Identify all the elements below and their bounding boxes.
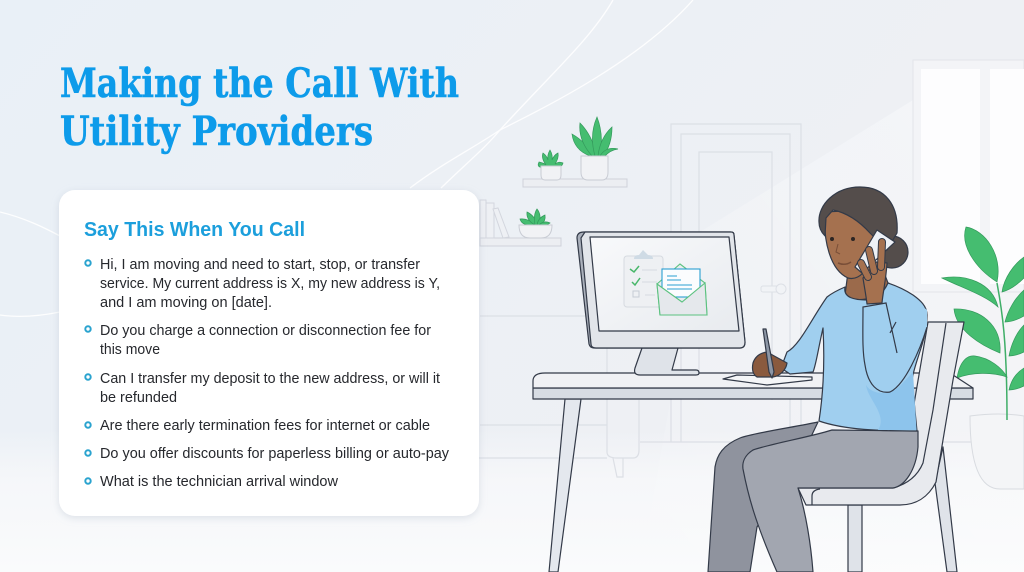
lower shelf with books and plant	[480, 200, 561, 246]
chair back and seat	[798, 322, 964, 505]
upper shelf with plants	[523, 117, 627, 187]
plant leaves	[942, 227, 1024, 390]
raised arm	[863, 292, 927, 392]
monitor	[577, 232, 745, 375]
bullet 2	[85, 323, 431, 358]
card heading: Say This When You Call	[84, 219, 305, 241]
title: Making the Call With	[60, 60, 459, 107]
hair	[819, 187, 897, 250]
stand	[635, 348, 699, 375]
desk leg	[549, 399, 581, 572]
rear chair leg	[935, 447, 957, 572]
bullet 5: Do you offer discounts for paperless billing or auto-pay	[100, 446, 450, 462]
bullet 2: Do you charge a connection or disconnection fee for	[100, 323, 431, 339]
chair	[798, 322, 964, 572]
sweater shadow	[866, 372, 916, 430]
sweater body	[781, 283, 927, 431]
bullet 3: be refunded	[100, 390, 177, 406]
bullet 2: this move	[100, 342, 160, 358]
books	[480, 200, 509, 238]
small succulent	[538, 150, 563, 180]
hand	[861, 242, 887, 304]
phone	[855, 230, 895, 273]
hair bun	[876, 236, 908, 268]
pot and leafy plant	[942, 227, 1024, 489]
bullet 1: and I am moving on [date].	[100, 295, 272, 311]
tablet, hand and pen	[723, 329, 812, 385]
person on phone	[708, 187, 927, 572]
bullet 3: Can I transfer my deposit to the new address, or will it	[100, 371, 440, 387]
face features	[830, 237, 855, 264]
title	[60, 60, 459, 155]
sofa outline	[479, 316, 972, 477]
bullet 1: service. My current address is X, my new address is Y,	[100, 276, 440, 292]
plant stem	[997, 283, 1007, 420]
bullet 6: What is the technician arrival window	[100, 474, 339, 490]
title: Utility Providers	[60, 108, 373, 155]
bullet 1	[85, 257, 440, 311]
near leg	[743, 430, 918, 572]
screen icon: clipboard checklist	[624, 250, 663, 307]
far leg	[708, 422, 818, 572]
info card	[59, 190, 479, 516]
neck	[845, 262, 888, 300]
screen	[590, 237, 739, 331]
bullet 1: Hi, I am moving and need to start, stop, or transfer	[100, 257, 420, 273]
bullet 4: Are there early termination fees for internet or cable	[100, 418, 430, 434]
bowl plant	[519, 209, 552, 238]
window	[913, 60, 1024, 292]
front chair leg	[848, 505, 862, 572]
door	[671, 124, 801, 442]
face	[825, 210, 875, 279]
tall plant	[572, 117, 618, 180]
desk	[533, 373, 973, 572]
bullet 3	[85, 371, 440, 406]
screen icon: envelope with letter	[657, 264, 707, 315]
